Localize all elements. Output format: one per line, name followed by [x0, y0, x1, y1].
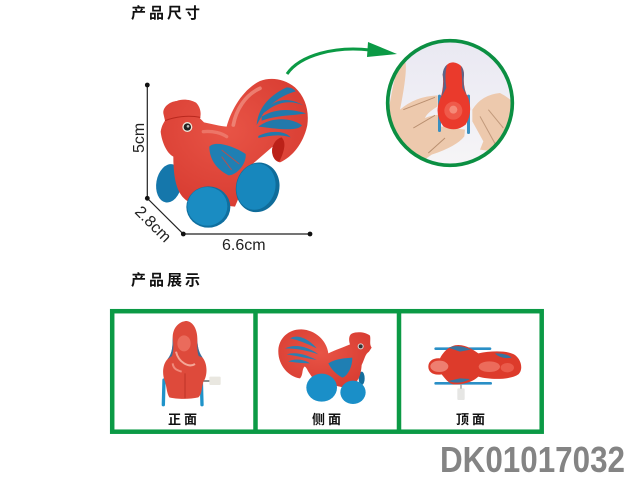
title: product size: 产品尺寸 [131, 5, 203, 22]
title: product display: 产品展示 [131, 272, 203, 289]
label: depth 2.8cm: 2.8cm [131, 203, 174, 246]
panel: top view [428, 345, 521, 400]
label: top view: 顶面 [456, 412, 488, 427]
display frame with three panels [112, 311, 542, 432]
toy body [438, 62, 470, 129]
tail feathers [257, 87, 306, 138]
right hand [472, 93, 510, 151]
left hand [388, 62, 465, 163]
main toy: red rooster on blue wheels [153, 79, 308, 228]
label: height 5cm: 5cm [131, 123, 148, 153]
wheels [231, 158, 285, 217]
panel: front view [163, 321, 221, 405]
panel: side view [278, 329, 372, 404]
toy wheels [438, 95, 441, 132]
arrow to inset photo [287, 42, 397, 74]
dimension lines [145, 83, 312, 236]
inset photo: hands winding the toy [385, 38, 515, 168]
wing [209, 144, 246, 175]
label: front view: 正面 [168, 412, 200, 427]
label: side view: 侧面 [312, 412, 344, 427]
label: width 6.6cm: 6.6cm [222, 237, 266, 254]
eye [182, 122, 192, 132]
